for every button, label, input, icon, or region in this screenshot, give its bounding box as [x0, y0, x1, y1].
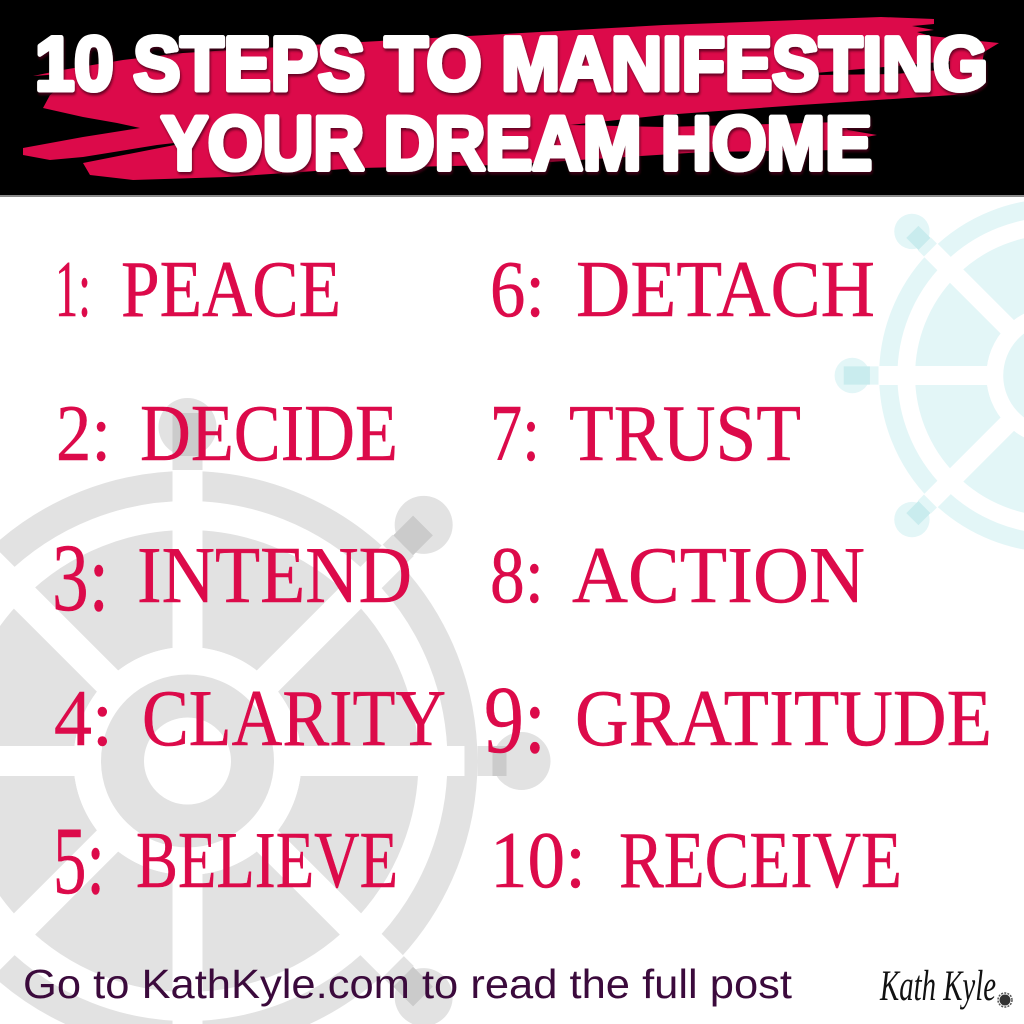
watermark: teal wheel — [835, 198, 1024, 553]
step 3: 3: — [52, 524, 109, 631]
step 1: PEACE — [121, 244, 341, 334]
step 8: ACTION — [572, 530, 865, 620]
title — [35, 22, 988, 186]
watermark: grey wheel — [0, 398, 550, 1024]
title: YOUR DREAM HOME — [161, 102, 872, 186]
step 9: GRATITUDE — [575, 673, 992, 763]
step 2 — [56, 388, 398, 478]
step 4: CLARITY — [142, 673, 446, 763]
step 9 — [484, 666, 992, 773]
step 10: RECEIVE — [619, 815, 902, 905]
step 4 — [54, 673, 446, 763]
step 5: 5: — [53, 807, 105, 914]
header band — [0, 0, 1024, 196]
step 7: TRUST — [569, 388, 801, 478]
step 10 — [490, 815, 902, 905]
step 9: 9: — [484, 666, 546, 773]
step 3: INTEND — [137, 530, 412, 620]
step 7 — [490, 388, 801, 478]
step 4: 4: — [54, 673, 113, 763]
step 1 — [55, 244, 341, 334]
footer call to action: Go to KathKyle.com to read the full post — [23, 961, 793, 1007]
brush stroke — [23, 17, 999, 180]
step 1: 1: — [55, 244, 91, 334]
icon: mandala — [998, 993, 1012, 1007]
step 2: DECIDE — [140, 388, 398, 478]
step 3 — [52, 524, 412, 631]
step 6: 6: — [490, 244, 545, 334]
step 5 — [53, 807, 398, 914]
steps: right column — [484, 244, 992, 905]
step 5: BELIEVE — [136, 815, 398, 905]
step 2: 2: — [56, 388, 111, 478]
step 10: 10: — [490, 815, 586, 905]
steps: left column — [52, 244, 446, 914]
step 6: DETACH — [576, 244, 875, 334]
step 8: 8: — [490, 530, 544, 620]
black slit in brush — [815, 61, 950, 75]
step 7: 7: — [490, 388, 540, 478]
